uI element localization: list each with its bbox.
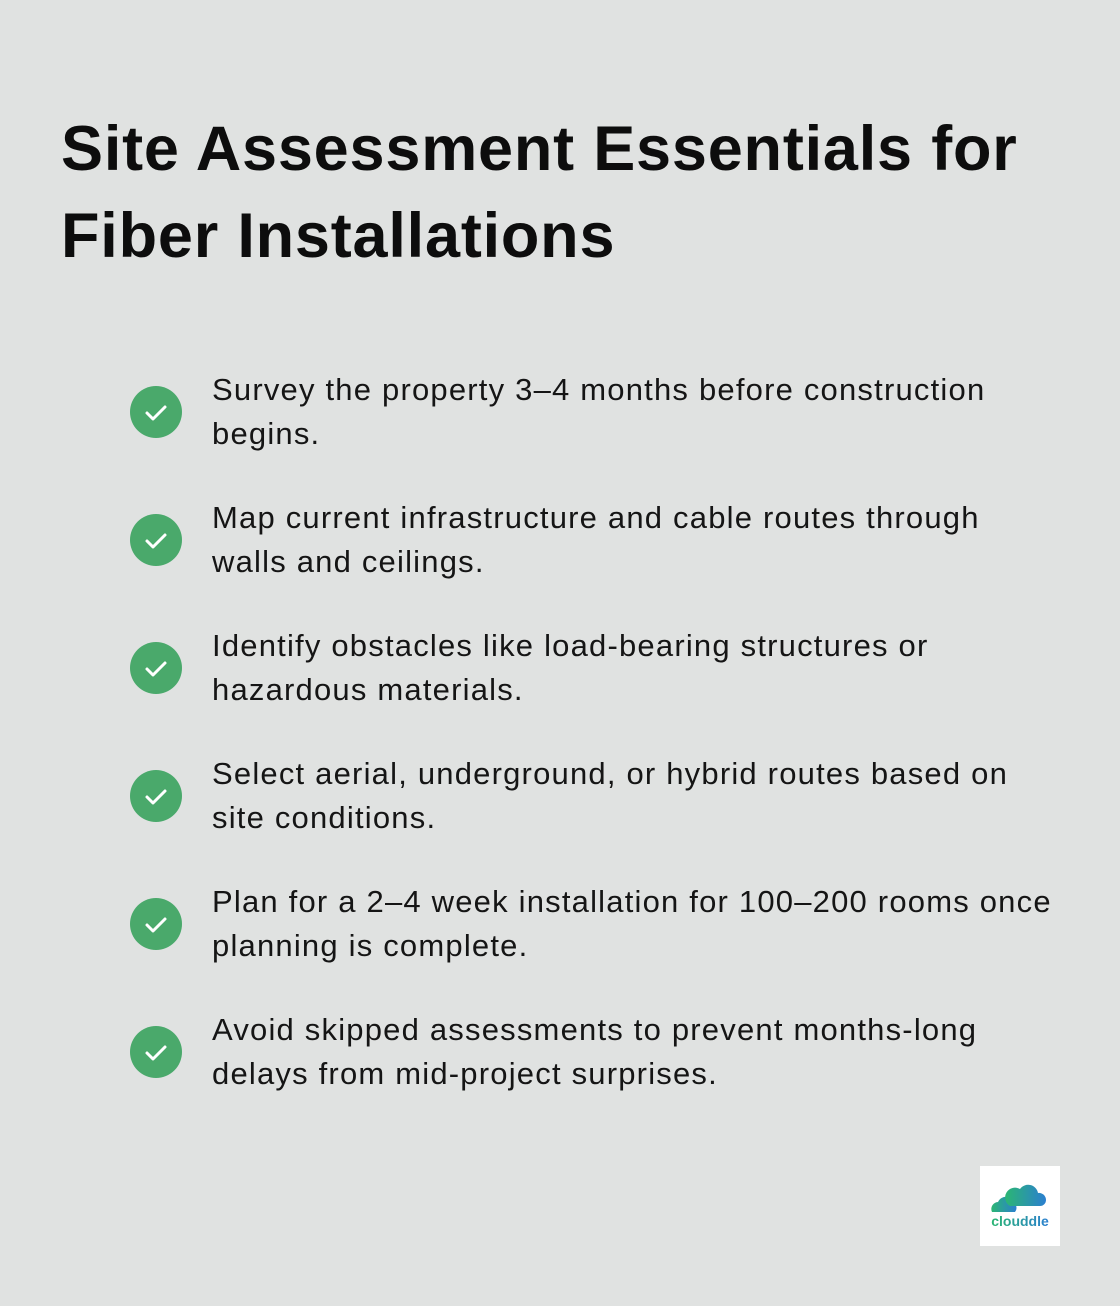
- text: [212, 372, 985, 451]
- text: [212, 884, 1052, 963]
- icon: check: [130, 1026, 182, 1078]
- item 1: [130, 372, 985, 451]
- logo: [980, 1166, 1060, 1246]
- item 3: [130, 628, 928, 707]
- title: Fiber Installations: [61, 201, 615, 271]
- title: Site Assessment Essentials for: [61, 114, 1018, 184]
- text: Survey the property 3–4 months before construction: [212, 372, 985, 407]
- text: Select aerial, underground, or hybrid routes based on: [212, 756, 1008, 791]
- text: delays from mid-project surprises.: [212, 1056, 718, 1091]
- text: [212, 756, 1008, 835]
- text: [212, 1012, 977, 1091]
- title: [61, 114, 1018, 271]
- logo: clouddle: [991, 1213, 1049, 1229]
- icon: check: [130, 386, 182, 438]
- text: [212, 628, 928, 707]
- item 2: [130, 500, 980, 579]
- item 6: [130, 1012, 977, 1091]
- icon: check: [130, 642, 182, 694]
- text: begins.: [212, 416, 320, 451]
- icon: check: [130, 770, 182, 822]
- text: Plan for a 2–4 week installation for 100–200 rooms once: [212, 884, 1052, 919]
- icon: check: [130, 514, 182, 566]
- text: hazardous materials.: [212, 672, 524, 707]
- text: site conditions.: [212, 800, 436, 835]
- text: Avoid skipped assessments to prevent months-long: [212, 1012, 977, 1047]
- icon: check: [130, 898, 182, 950]
- item 4: [130, 756, 1008, 835]
- text: Identify obstacles like load-bearing structures or: [212, 628, 928, 663]
- text: [212, 500, 980, 579]
- text: planning is complete.: [212, 928, 528, 963]
- text: Map current infrastructure and cable routes through: [212, 500, 980, 535]
- item 5: [130, 884, 1052, 963]
- text: walls and ceilings.: [212, 544, 485, 579]
